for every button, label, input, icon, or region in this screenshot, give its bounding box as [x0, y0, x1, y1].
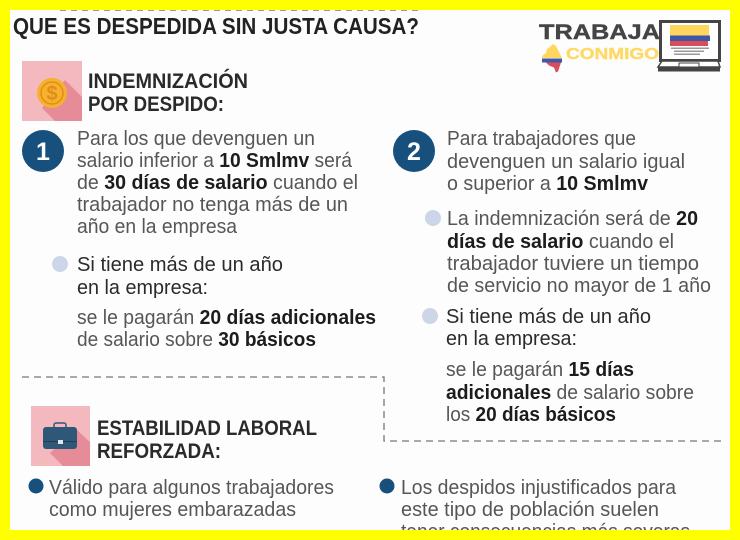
text block: case 2 [447, 128, 685, 195]
icon: gold coin [22, 61, 82, 121]
bullet: light [425, 210, 441, 226]
text block: additional days: se le pagarán 20 días adicionales [77, 307, 376, 329]
text block: 15 days: se le pagarán 15 días [446, 359, 634, 381]
text block: case 1: año en la empresa [77, 216, 238, 238]
text block: more than a year, right: en la empresa: [446, 328, 577, 350]
icon: gold coin: $ [46, 83, 58, 105]
text block: more than a year: en la empresa: [77, 277, 208, 299]
text block: 20 days: La indemnización será de 20 [447, 208, 698, 230]
logo: Trabaja Conmigo: TRABAJA [539, 21, 660, 44]
text block: case 1: salario inferior a 10 Smlmv será [77, 150, 353, 172]
text block: case 2: Para trabajadores que [447, 128, 636, 150]
text block: more than a year, right: Si tiene más de un año [446, 306, 651, 328]
number badge 2 [393, 130, 435, 172]
number badge 1: 1 [36, 138, 50, 166]
text block: valid for: Válido para algunos trabajadores [49, 477, 334, 499]
text block: 20 days: de servicio no mayor de 1 año [447, 275, 711, 297]
bullet: dark [28, 478, 44, 494]
icon: briefcase [31, 406, 90, 466]
number badge 2: 2 [407, 138, 421, 166]
text block: case 2: devenguen un salario igual [447, 151, 685, 173]
text block: more than a year: Si tiene más de un año [77, 254, 283, 276]
heading: estabilidad laboral reforzada: REFORZADA: [97, 440, 221, 463]
text block: 20 days: días de salario cuando el [447, 231, 674, 253]
title: QUE ES DESPEDIDA SIN JUSTA CAUSA? [13, 13, 419, 39]
text block: case 1: trabajador no tenga más de un [77, 194, 348, 216]
text block: additional days [78, 308, 376, 346]
text block: 20 days: trabajador tuviere un tiempo [447, 253, 699, 275]
text block: more than a year, right [446, 306, 651, 350]
text block: 20 days [447, 208, 711, 297]
heading: indemnización por despido: INDEMNIZACIÓN [88, 69, 248, 93]
text block: 15 days [446, 360, 694, 421]
bullet: light [422, 308, 438, 324]
heading: estabilidad laboral reforzada: ESTABILIDAD LABORAL [97, 417, 317, 440]
number badge 1 [22, 130, 64, 172]
text block: 15 days: los 20 días básicos [446, 404, 616, 426]
text block: case 1: de 30 días de salario cuando el [77, 172, 358, 194]
text block: consequences: Los despidos injustificados para [401, 477, 677, 499]
heading: indemnización por despido [89, 68, 247, 111]
text block: consequences: este tipo de población suelen [401, 499, 659, 521]
heading: estabilidad laboral reforzada [98, 420, 316, 458]
heading: indemnización por despido: POR DESPIDO: [88, 93, 224, 116]
text block: case 1: Para los que devenguen un [77, 128, 315, 150]
bullet: light [52, 256, 68, 272]
logo: Trabaja Conmigo: CONMIGO [566, 46, 659, 63]
text block: 15 days: adicionales de salario sobre [446, 382, 694, 404]
text block: case 2: o superior a 10 Smlmv [447, 173, 649, 195]
text block: valid for [49, 477, 334, 521]
bullet: dark [380, 478, 394, 494]
logo: Trabaja Conmigo [539, 21, 720, 72]
text block: consequences [401, 479, 690, 530]
text block: case 1 [77, 128, 358, 238]
text block: more than a year [77, 254, 283, 299]
text block: valid for: como mujeres embarazadas [49, 499, 296, 521]
text block: additional days: de salario sobre 30 básicos [77, 329, 316, 351]
